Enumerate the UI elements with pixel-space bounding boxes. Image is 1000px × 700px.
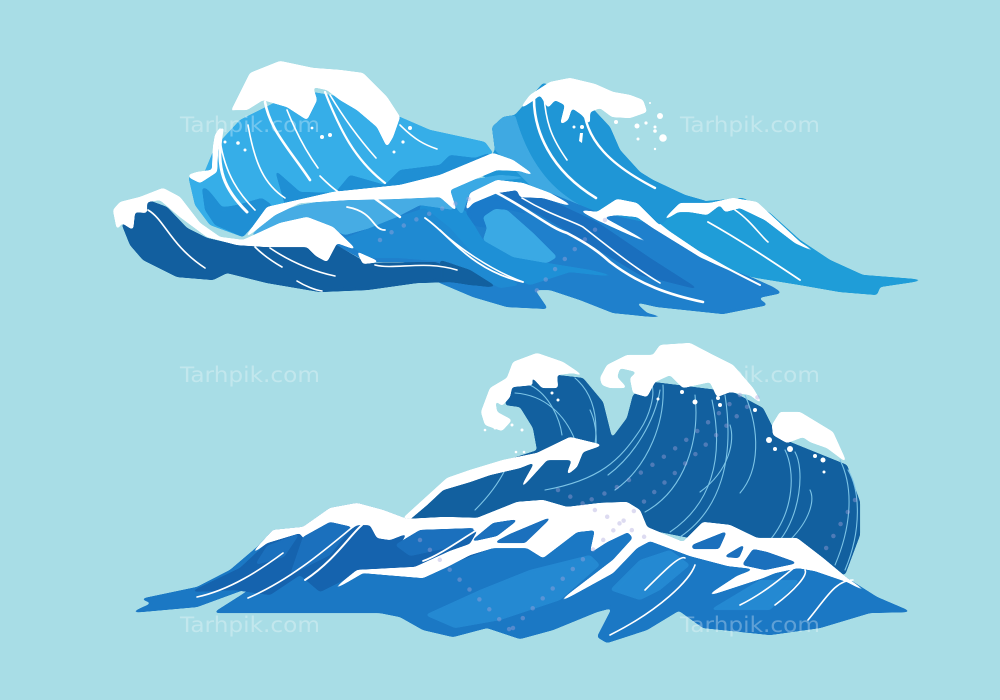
left crest mid shadow — [275, 152, 492, 205]
left big crest body — [188, 90, 493, 237]
front wave light patches — [425, 550, 800, 628]
middle wave upper light — [440, 175, 535, 215]
watermarks: Tarhpik.com — [179, 113, 320, 137]
watermarks — [179, 113, 820, 637]
front wave streaks — [197, 525, 853, 635]
ridge foam one — [243, 153, 537, 240]
watermark dots — [380, 195, 855, 630]
second crest foam — [515, 78, 647, 125]
left crest spray — [224, 126, 412, 154]
lower spray — [484, 390, 826, 474]
watermarks: Tarhpik.com — [179, 613, 320, 637]
middle wave curl — [466, 196, 530, 228]
front wave body — [130, 500, 912, 643]
upper wave group — [113, 61, 927, 319]
front wave dark top zone — [190, 510, 500, 595]
second crest light side — [492, 115, 600, 214]
front foam blue pockets — [255, 516, 798, 575]
watermarks: Tarhpik.com — [179, 363, 320, 387]
left curl foam — [481, 353, 587, 431]
navy wave arcs — [475, 378, 857, 570]
middle wave mid tone — [420, 205, 625, 285]
watermarks: Tarhpik.com — [679, 363, 820, 387]
left crest low shadow — [202, 188, 272, 237]
second crest body — [480, 83, 713, 226]
lower wave group — [130, 343, 912, 643]
left crest foam — [188, 61, 400, 183]
middle band light blue — [248, 190, 455, 238]
dark wedge on middle wave — [440, 260, 497, 287]
watermarks: Tarhpik.com — [679, 113, 820, 137]
second ridge fingers — [660, 198, 830, 260]
navy slope foam — [403, 437, 603, 521]
middle wave body — [333, 180, 782, 319]
front foam crest — [247, 500, 880, 606]
ridge foam two curl — [465, 180, 760, 285]
watermarks: Tarhpik.com — [679, 613, 820, 637]
middle crest foam — [600, 343, 763, 405]
middle wave light pool — [483, 209, 557, 263]
wave streaks — [148, 193, 800, 302]
middle wave dark lines band — [497, 190, 700, 290]
second crest spray — [572, 102, 667, 150]
middle band deep tone — [340, 208, 520, 288]
front wave foam — [113, 188, 380, 264]
dark front wave — [122, 200, 497, 292]
left crest streaks — [220, 92, 437, 212]
navy back wave — [405, 372, 860, 575]
far right swell — [660, 198, 927, 295]
second crest streaks — [534, 95, 655, 198]
right crest foam — [772, 412, 847, 463]
